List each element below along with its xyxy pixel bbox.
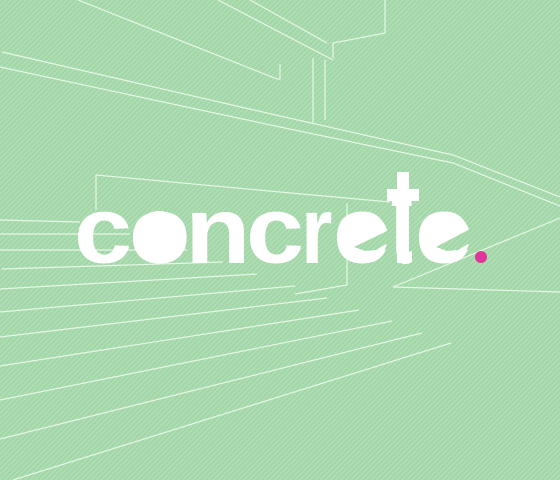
letter accent: crossbar and top of the t bbox=[387, 172, 419, 263]
wordmark: concrete. bbox=[74, 144, 487, 291]
magenta full stop bbox=[475, 251, 487, 263]
wordmark: concrete.: e bbox=[415, 176, 472, 283]
letter accent: e counters and slanted cuts bbox=[338, 212, 477, 262]
wordmark: concrete.: . bbox=[476, 226, 487, 270]
wordmark: concrete.: o bbox=[129, 176, 191, 283]
wordmark: concrete.: c bbox=[74, 178, 132, 283]
wordmark: concrete.: t bbox=[391, 144, 413, 291]
wordmark: concrete.: r bbox=[301, 177, 332, 283]
wordmark: concrete.: c bbox=[246, 178, 304, 283]
letter accent: solid counter of the o bbox=[133, 211, 185, 263]
wordmark: concrete.: n bbox=[185, 178, 251, 284]
wordmark: concrete.: e bbox=[333, 176, 390, 283]
